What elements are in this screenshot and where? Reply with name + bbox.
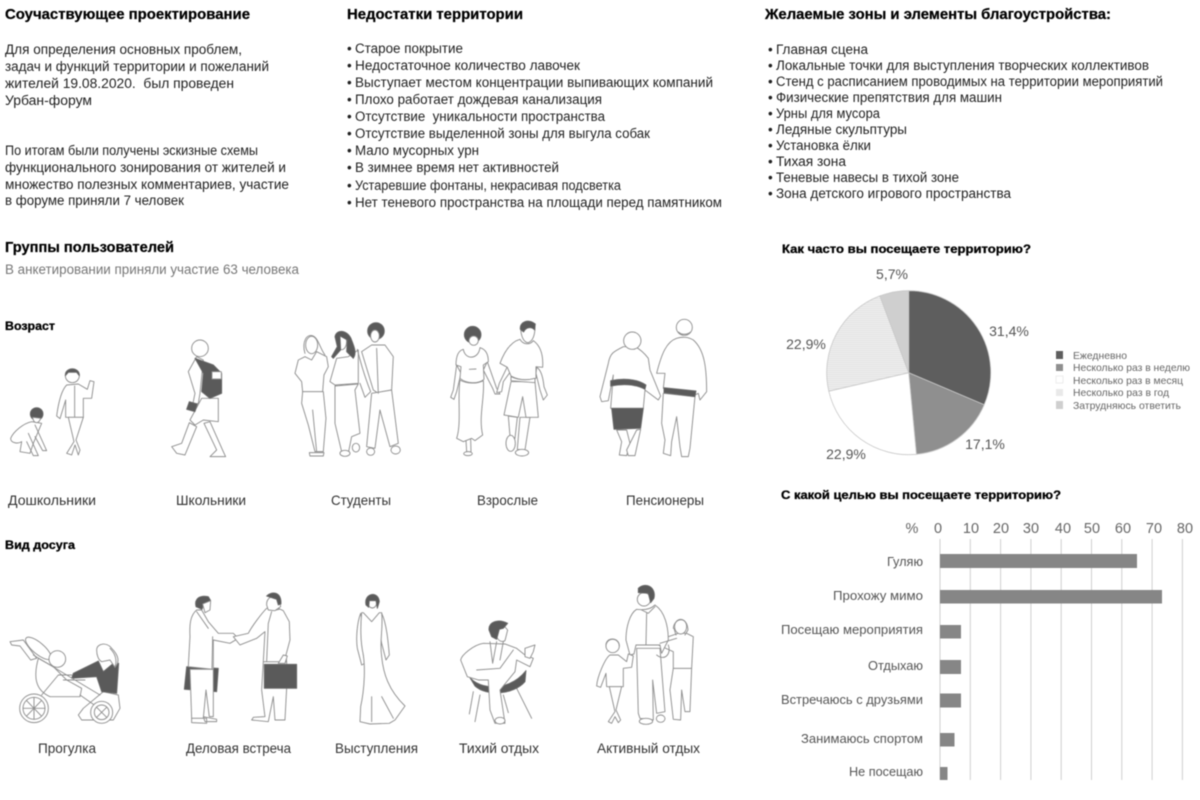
category labels: Занимаюсь спортом bbox=[801, 732, 923, 746]
list: drawbacks: • bbox=[347, 160, 352, 175]
heading: territory drawbacks: Недостатки территории bbox=[347, 6, 523, 23]
labels: age groups: Пенсионеры bbox=[626, 492, 704, 508]
icon: family active rest bbox=[597, 585, 693, 724]
icon: preschool children bbox=[11, 369, 94, 456]
list: desired zones: • bbox=[768, 186, 773, 201]
axis labels: 50 bbox=[1084, 521, 1100, 537]
labels: age groups: Студенты bbox=[331, 492, 391, 508]
list: desired zones: • bbox=[768, 74, 773, 89]
list: desired zones: • bbox=[768, 122, 773, 137]
heading: age: Возраст bbox=[5, 319, 55, 333]
list: desired zones: • bbox=[768, 58, 773, 73]
axis labels: 40 bbox=[1055, 521, 1071, 537]
category labels: Гуляю bbox=[887, 555, 923, 569]
pie value labels: 5,7% bbox=[876, 266, 908, 282]
list: drawbacks: • bbox=[347, 143, 352, 158]
bars bbox=[940, 554, 1162, 780]
axis labels: 20 bbox=[993, 521, 1009, 537]
list: desired zones: Локальные точки для выступления творческих коллективов bbox=[776, 58, 1149, 73]
list: desired zones: Стенд с расписанием проводимых на территории мероприятий bbox=[776, 74, 1163, 89]
list: drawbacks: Старое покрытие bbox=[355, 41, 463, 56]
labels: leisure types: Тихий отдых bbox=[459, 740, 539, 756]
pie legend: Несколько раз в год bbox=[1073, 387, 1169, 399]
list: desired zones: Урны для мусора bbox=[776, 106, 880, 121]
text block: forum results: функционального зонирования от жителей и bbox=[5, 160, 286, 175]
subtitle: survey participants: В анкетировании приняли участие 63 человека bbox=[5, 262, 299, 277]
pie value labels: 17,1% bbox=[965, 436, 1005, 452]
axis labels: 60 bbox=[1115, 521, 1131, 537]
list: desired zones: • bbox=[768, 42, 773, 57]
list: desired zones: Главная сцена bbox=[776, 42, 868, 57]
list: desired zones: Ледяные скульптуры bbox=[776, 122, 907, 137]
text block: forum intro: жителей 19.08.2020. был проведен bbox=[5, 76, 234, 91]
list: desired zones: Зона детского игрового пространства bbox=[776, 186, 1011, 201]
labels: age groups: Взрослые bbox=[477, 492, 538, 508]
heading: desired zones: Желаемые зоны и элементы благоустройства: bbox=[764, 6, 1111, 23]
category labels: Отдыхаю bbox=[868, 659, 923, 673]
axis labels: 10 bbox=[963, 521, 979, 537]
category labels: Прохожу мимо bbox=[833, 589, 923, 603]
list: drawbacks bbox=[347, 41, 722, 210]
list: drawbacks: • bbox=[347, 195, 352, 210]
labels: leisure types: Прогулка bbox=[38, 740, 96, 756]
list: drawbacks: В зимнее время нет активностей bbox=[355, 160, 559, 175]
list: drawbacks: Отсутствие выделенной зоны для выгула собак bbox=[355, 126, 650, 141]
icon: pensioners couple bbox=[600, 319, 707, 457]
labels: leisure types: Активный отдых bbox=[597, 740, 700, 756]
icon: stroller walk bbox=[10, 634, 120, 723]
list: desired zones: • bbox=[768, 90, 773, 105]
axis labels: % bbox=[906, 521, 919, 537]
text block: forum intro bbox=[5, 42, 269, 108]
heading: visit frequency: Как часто вы посещаете территорию? bbox=[782, 242, 1031, 256]
category labels: Встречаюсь с друзьями bbox=[781, 693, 923, 707]
list: drawbacks: Нет теневого пространства на площади перед памятником bbox=[355, 195, 722, 210]
icon: performer in dress bbox=[357, 594, 405, 724]
panel: visit frequency pie bbox=[782, 242, 1190, 462]
pie legend: Несколько раз в неделю bbox=[1073, 362, 1190, 374]
list: desired zones bbox=[768, 42, 1163, 201]
text block: forum results: По итогам были получены эскизные схемы bbox=[5, 143, 258, 158]
labels: age groups: Школьники bbox=[176, 492, 246, 508]
list: drawbacks: • bbox=[347, 126, 352, 141]
list: drawbacks: Отсутствие уникальности пространства bbox=[355, 109, 605, 124]
panel: visit purpose bar chart bbox=[781, 488, 1193, 780]
list: desired zones: • bbox=[768, 154, 773, 169]
list: drawbacks: • bbox=[347, 178, 352, 193]
list: desired zones: Физические препятствия для машин bbox=[776, 90, 1002, 105]
list: drawbacks: Выступает местом концентрации выпивающих компаний bbox=[355, 75, 713, 90]
list: desired zones: Теневые навесы в тихой зоне bbox=[776, 170, 959, 185]
heading: visit purpose: С какой целью вы посещаете территорию? bbox=[781, 488, 1061, 502]
pie legend: Ежедневно bbox=[1073, 350, 1127, 362]
axis labels: 80 bbox=[1177, 521, 1193, 537]
labels: leisure types bbox=[38, 740, 700, 756]
axis labels bbox=[906, 521, 1193, 537]
axis labels: 0 bbox=[934, 521, 942, 537]
text block: forum results bbox=[5, 143, 289, 208]
icon: seated man bbox=[461, 621, 535, 724]
list: desired zones: • bbox=[768, 106, 773, 121]
icon: schoolchild with backpack bbox=[172, 340, 226, 457]
labels: age groups bbox=[8, 492, 704, 508]
panel: participatory design bbox=[5, 6, 289, 208]
pie value labels: 31,4% bbox=[989, 323, 1029, 339]
list: drawbacks: Плохо работает дождевая канализация bbox=[355, 92, 602, 107]
text block: forum intro: задач и функций территории и пожеланий bbox=[5, 59, 269, 74]
text block: forum results: в форуме приняли 7 человек bbox=[5, 193, 184, 208]
list: drawbacks: Мало мусорных урн bbox=[355, 143, 479, 158]
list: drawbacks: • bbox=[347, 109, 352, 124]
labels: age groups: Дошкольники bbox=[8, 492, 96, 508]
axis labels: 30 bbox=[1023, 521, 1039, 537]
labels: leisure types: Деловая встреча bbox=[186, 740, 291, 756]
list: drawbacks: Недостаточное количество лавочек bbox=[355, 58, 580, 73]
icon: students group bbox=[295, 323, 400, 456]
panel: desired zones bbox=[764, 6, 1163, 201]
axis labels: 70 bbox=[1146, 521, 1162, 537]
list: drawbacks: • bbox=[347, 41, 352, 56]
heading: participatory design: Соучаствующее проектирование bbox=[5, 6, 250, 23]
text block: forum intro: Урбан-форум bbox=[5, 93, 92, 108]
pie value labels bbox=[786, 266, 1029, 462]
list: desired zones: Тихая зона bbox=[776, 154, 846, 169]
list: drawbacks: • bbox=[347, 92, 352, 107]
heading: user groups: Группы пользователей bbox=[5, 239, 174, 256]
list: drawbacks: Устаревшие фонтаны, некрасивая подсветка bbox=[355, 178, 621, 193]
list: drawbacks: • bbox=[347, 75, 352, 90]
pie chart bbox=[827, 291, 991, 455]
category labels: Не посещаю bbox=[849, 765, 923, 779]
list: desired zones: • bbox=[768, 170, 773, 185]
pie value labels: 22,9% bbox=[826, 446, 866, 462]
heading: leisure type: Вид досуга bbox=[5, 538, 75, 552]
category labels bbox=[781, 555, 923, 779]
pie legend: Несколько раз в месяц bbox=[1073, 375, 1183, 387]
category labels: Посещаю мероприятия bbox=[781, 623, 923, 637]
icon: adult couple bbox=[451, 321, 547, 456]
pie legend bbox=[1056, 350, 1190, 412]
pie value labels: 22,9% bbox=[786, 336, 826, 352]
list: desired zones: Установка ёлки bbox=[776, 138, 871, 153]
icon: business meeting bbox=[184, 593, 297, 723]
list: drawbacks: • bbox=[347, 58, 352, 73]
text block: forum intro: Для определения основных проблем, bbox=[5, 42, 242, 57]
text block: forum results: множество полезных комментариев, участие bbox=[5, 177, 289, 192]
labels: leisure types: Выступления bbox=[335, 740, 418, 756]
list: desired zones: • bbox=[768, 138, 773, 153]
pie legend: Затрудняюсь ответить bbox=[1073, 400, 1182, 412]
panel: territory drawbacks bbox=[347, 6, 722, 210]
